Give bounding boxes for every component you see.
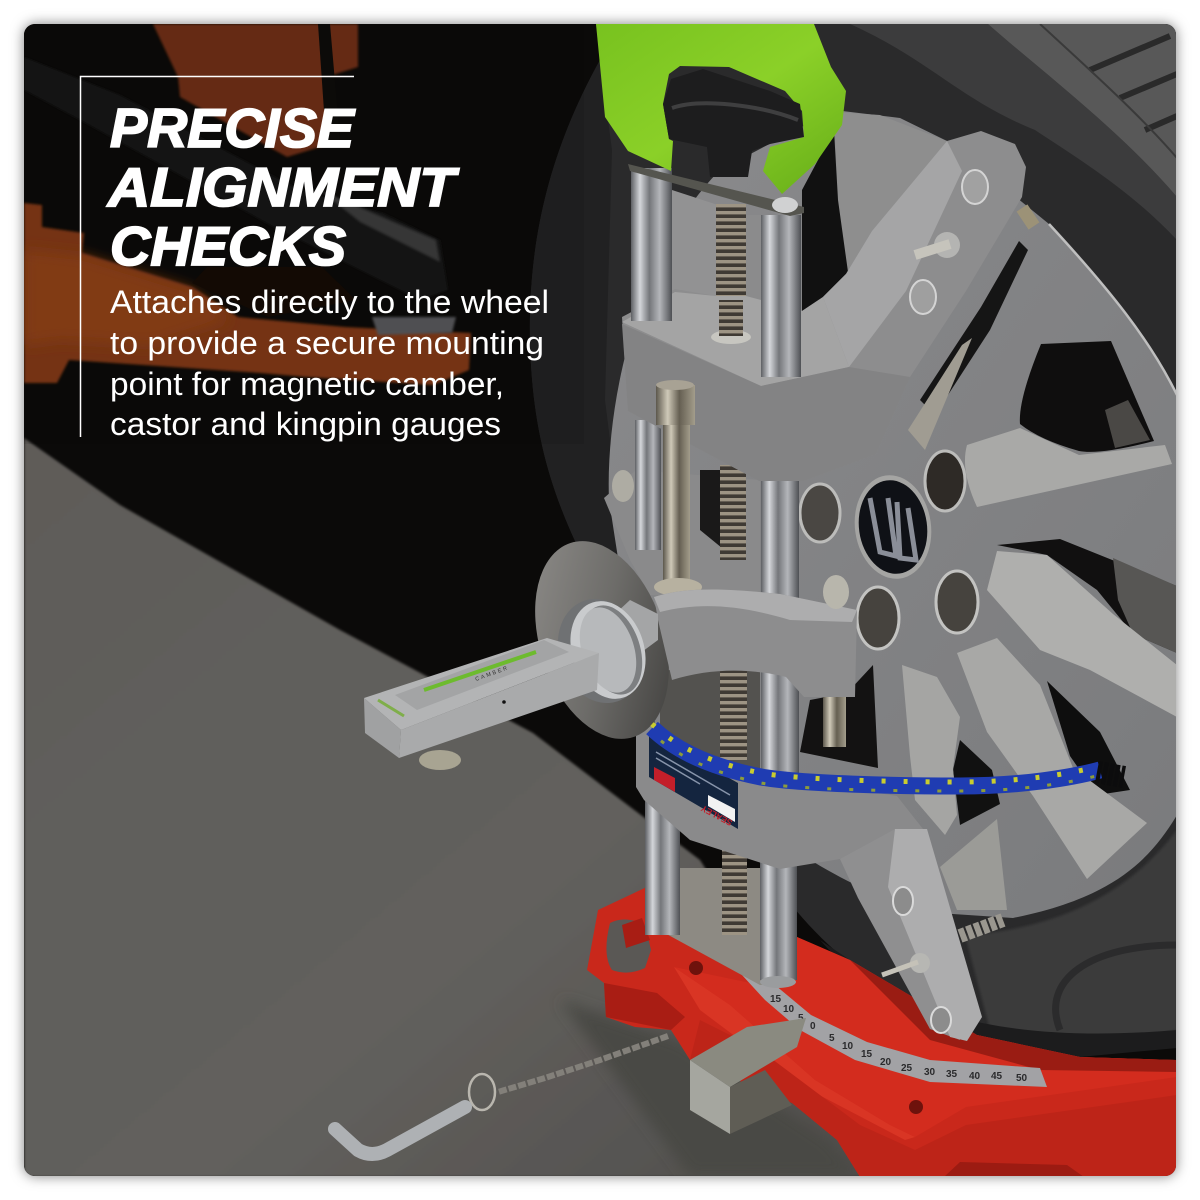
arm ledge highlight: [823, 141, 962, 367]
body text: [110, 284, 549, 442]
tread grooves: [1040, 24, 1177, 158]
gauge inset panel: [395, 640, 569, 710]
arm hole lower: [910, 280, 936, 314]
lug hole lower: [857, 587, 899, 649]
upper left rod: [631, 168, 672, 323]
badge emblem: [870, 498, 916, 560]
vehicle lift: panel side dark: [318, 24, 334, 140]
pin collar: [654, 578, 702, 596]
pad lip shade: [674, 967, 915, 1140]
tread band: [988, 24, 1177, 197]
clip interior: [730, 1070, 792, 1134]
lower left rod: [645, 795, 680, 935]
body text: castor and kingpin gauges: [110, 406, 501, 442]
vehicle lift: frame glint: [320, 190, 440, 262]
camber gauge: [364, 588, 658, 770]
vehicle lift: recess: [192, 267, 356, 317]
upper right rod: [761, 215, 801, 377]
cap nut: [823, 575, 849, 609]
lower arm hole top: [893, 887, 913, 915]
arm hole upper: [962, 170, 988, 204]
backing between rods: [672, 190, 718, 300]
pad handle inner red: [622, 918, 650, 948]
crossbar highlight: [654, 589, 857, 622]
label card: [649, 733, 738, 829]
garage floor: [24, 438, 900, 1177]
lit spoke lower: [902, 665, 960, 835]
green glove: [596, 24, 846, 194]
tyre valve bolt: [960, 920, 1003, 936]
lower right rod: [760, 860, 797, 980]
cord body: [652, 728, 1100, 786]
bottom tyre edge: [820, 940, 1177, 1057]
lit spoke upper right: [965, 428, 1172, 507]
middle left rod: [635, 420, 661, 550]
backing plate: [604, 470, 760, 600]
body text: to provide a secure mounting: [110, 325, 544, 361]
badge face: [853, 476, 933, 578]
lower right rod segment: [761, 670, 799, 800]
text area shade: [24, 24, 584, 444]
sidewall ring: [1056, 945, 1177, 1030]
scale numbers: 10: [783, 1004, 795, 1015]
scale numbers: 5: [829, 1033, 835, 1044]
window lower: [953, 740, 1000, 825]
vehicle lift: black frame bar: [24, 57, 448, 300]
scale numbers: 20: [880, 1057, 892, 1068]
upper left rod stub: [631, 290, 672, 321]
wheel clamp knurl: [1022, 208, 1034, 226]
pad handle slot: [606, 919, 651, 973]
centre badge: [848, 470, 938, 584]
pin head: [656, 385, 695, 425]
thread stub: [719, 300, 743, 336]
scale numbers: 10: [842, 1041, 854, 1052]
title: CHECKS: [110, 215, 346, 277]
dark gap: [700, 470, 722, 548]
window lower left: [800, 665, 878, 768]
collar ring: [558, 591, 658, 709]
bungee cord: [652, 724, 1124, 791]
backing right of thread: [746, 215, 761, 305]
brand logo box: [708, 795, 735, 822]
corner frame rule: [80, 76, 354, 437]
hitch pin: [335, 1107, 465, 1154]
lower crossbar: [636, 722, 923, 869]
front panel shade: [622, 324, 910, 481]
pad raised plate: [674, 937, 1177, 1137]
thread collar: [711, 330, 751, 344]
bottom sidewall light: [965, 830, 1177, 1042]
gold pin: [654, 380, 702, 596]
vehicle lift: orange arm: [24, 203, 471, 385]
backing plate and middle rods: [604, 420, 846, 800]
floor shadow under pad: [568, 1004, 832, 1174]
lug hole right: [936, 571, 978, 633]
tyre carcass: [605, 24, 1176, 1030]
degree scale: [742, 965, 1047, 1087]
scale numbers: 45: [991, 1071, 1003, 1082]
top surface: [622, 292, 849, 386]
red warning tag: [654, 767, 675, 792]
pad bottom handle: [944, 1162, 1084, 1177]
brand name: SEALEY: [699, 803, 734, 828]
scale numbers: 0: [810, 1021, 816, 1032]
scale numbers: 40: [969, 1071, 981, 1082]
pointer clip: [690, 1018, 806, 1134]
lug hole left: [800, 484, 840, 542]
middle bracket: [654, 575, 857, 697]
dark strip behind arm: [920, 241, 1028, 415]
scale label: CAMBER: [475, 665, 510, 683]
collar face: [570, 600, 646, 700]
brake glint: [1105, 400, 1150, 448]
title: [106, 97, 460, 277]
gauge side face: [399, 653, 599, 758]
brake calliper: [1113, 558, 1177, 653]
pad bolt hole lower: [909, 1100, 923, 1114]
gauge screw hole: [502, 700, 506, 704]
thumb screw: [915, 232, 960, 258]
pad shadow under tyre: [850, 960, 1177, 1072]
lit spoke right: [987, 551, 1177, 717]
lower rim gap: [660, 670, 760, 770]
top bracket: [622, 131, 1034, 481]
spirit level scale: [424, 652, 536, 690]
cord hook end: [1097, 772, 1124, 777]
cord flecks upper: [652, 724, 1100, 782]
pad lower face: [690, 1020, 1177, 1177]
middle threaded rod: [720, 465, 746, 560]
lit spoke lower right: [957, 638, 1147, 879]
upper rods: [631, 168, 761, 336]
label fine print: [656, 752, 730, 795]
concave panel lower: [940, 819, 1007, 910]
black knob: [663, 69, 804, 177]
lower threaded rod segment: [720, 670, 747, 760]
magnet foot: [419, 750, 461, 770]
title: ALIGNMENT: [106, 156, 460, 218]
scale numbers: 35: [946, 1069, 958, 1080]
pad body: [587, 880, 1177, 1177]
top sidewall wave: [850, 24, 1177, 240]
chrome glint behind arm: [908, 338, 972, 450]
lower arm hole bottom: [931, 1007, 951, 1033]
split ring: [469, 1074, 495, 1110]
glove and knob: [596, 24, 846, 194]
chain: [498, 1036, 668, 1092]
pad bolt hole upper: [689, 961, 703, 975]
cord flecks lower: [652, 733, 1100, 791]
top plate bolt: [772, 197, 798, 213]
knob highlight: [672, 103, 798, 120]
left sidewall: [542, 62, 617, 554]
scale strip: [742, 965, 1047, 1087]
window right: [997, 539, 1177, 653]
collar groove: [571, 598, 653, 702]
clip front: [690, 1060, 730, 1134]
middle crossbar: [654, 589, 857, 697]
gauge top face: [364, 638, 599, 730]
upper fin: [834, 112, 947, 274]
end level: [378, 700, 404, 716]
upper threaded rod: [716, 204, 746, 336]
body text: point for magnetic camber,: [110, 366, 504, 402]
scale numbers: 15: [770, 994, 782, 1005]
mounting disc: [512, 524, 692, 756]
body text: Attaches directly to the wheel: [110, 284, 549, 320]
pad front shade: [604, 983, 685, 1030]
pin top: [656, 380, 694, 390]
scale numbers: 30: [924, 1067, 936, 1078]
tyre: [530, 24, 1177, 1057]
red turntable pad: [587, 880, 1177, 1177]
cap nut upper: [612, 470, 634, 502]
rim base: [609, 110, 1177, 918]
vehicle lift: threaded foot: [372, 317, 456, 335]
clip top: [690, 1018, 806, 1087]
scale numbers: 15: [861, 1049, 873, 1060]
middle right rod segment: [761, 475, 799, 610]
hex spacer: [823, 690, 846, 747]
alloy wheel: [609, 110, 1177, 918]
scale numbers: [770, 994, 1028, 1084]
lower arm thumb screw: [882, 953, 930, 975]
top plate: [628, 164, 804, 216]
top bracket body: [622, 131, 1026, 481]
gauge end face: [364, 698, 401, 758]
scale numbers: 25: [901, 1063, 913, 1074]
rim outer lip: [1049, 224, 1177, 395]
scale numbers: 5: [798, 1013, 804, 1024]
pin shaft: [663, 420, 690, 585]
gauge back stem: [600, 600, 658, 668]
right rod tip: [760, 976, 796, 988]
window lower right: [1047, 681, 1130, 795]
lower bracket: [636, 722, 1003, 1041]
gauge collar: [545, 588, 658, 714]
lower rods and plate: [645, 795, 797, 988]
title: PRECISE: [110, 97, 356, 159]
window upper right: [1020, 341, 1154, 452]
vehicle lift: lit left end of arm: [24, 250, 230, 345]
lug hole upper: [925, 451, 965, 511]
scale numbers: 50: [1016, 1073, 1028, 1084]
dark recess beside rod: [802, 130, 848, 316]
lower arm plate: [888, 829, 982, 1041]
product label: [649, 733, 738, 829]
arm inner face: [840, 829, 960, 1040]
vehicle lift: upper orange panel: [153, 24, 358, 157]
lower threaded rod: [722, 850, 747, 935]
lower steel plate: [650, 868, 770, 985]
